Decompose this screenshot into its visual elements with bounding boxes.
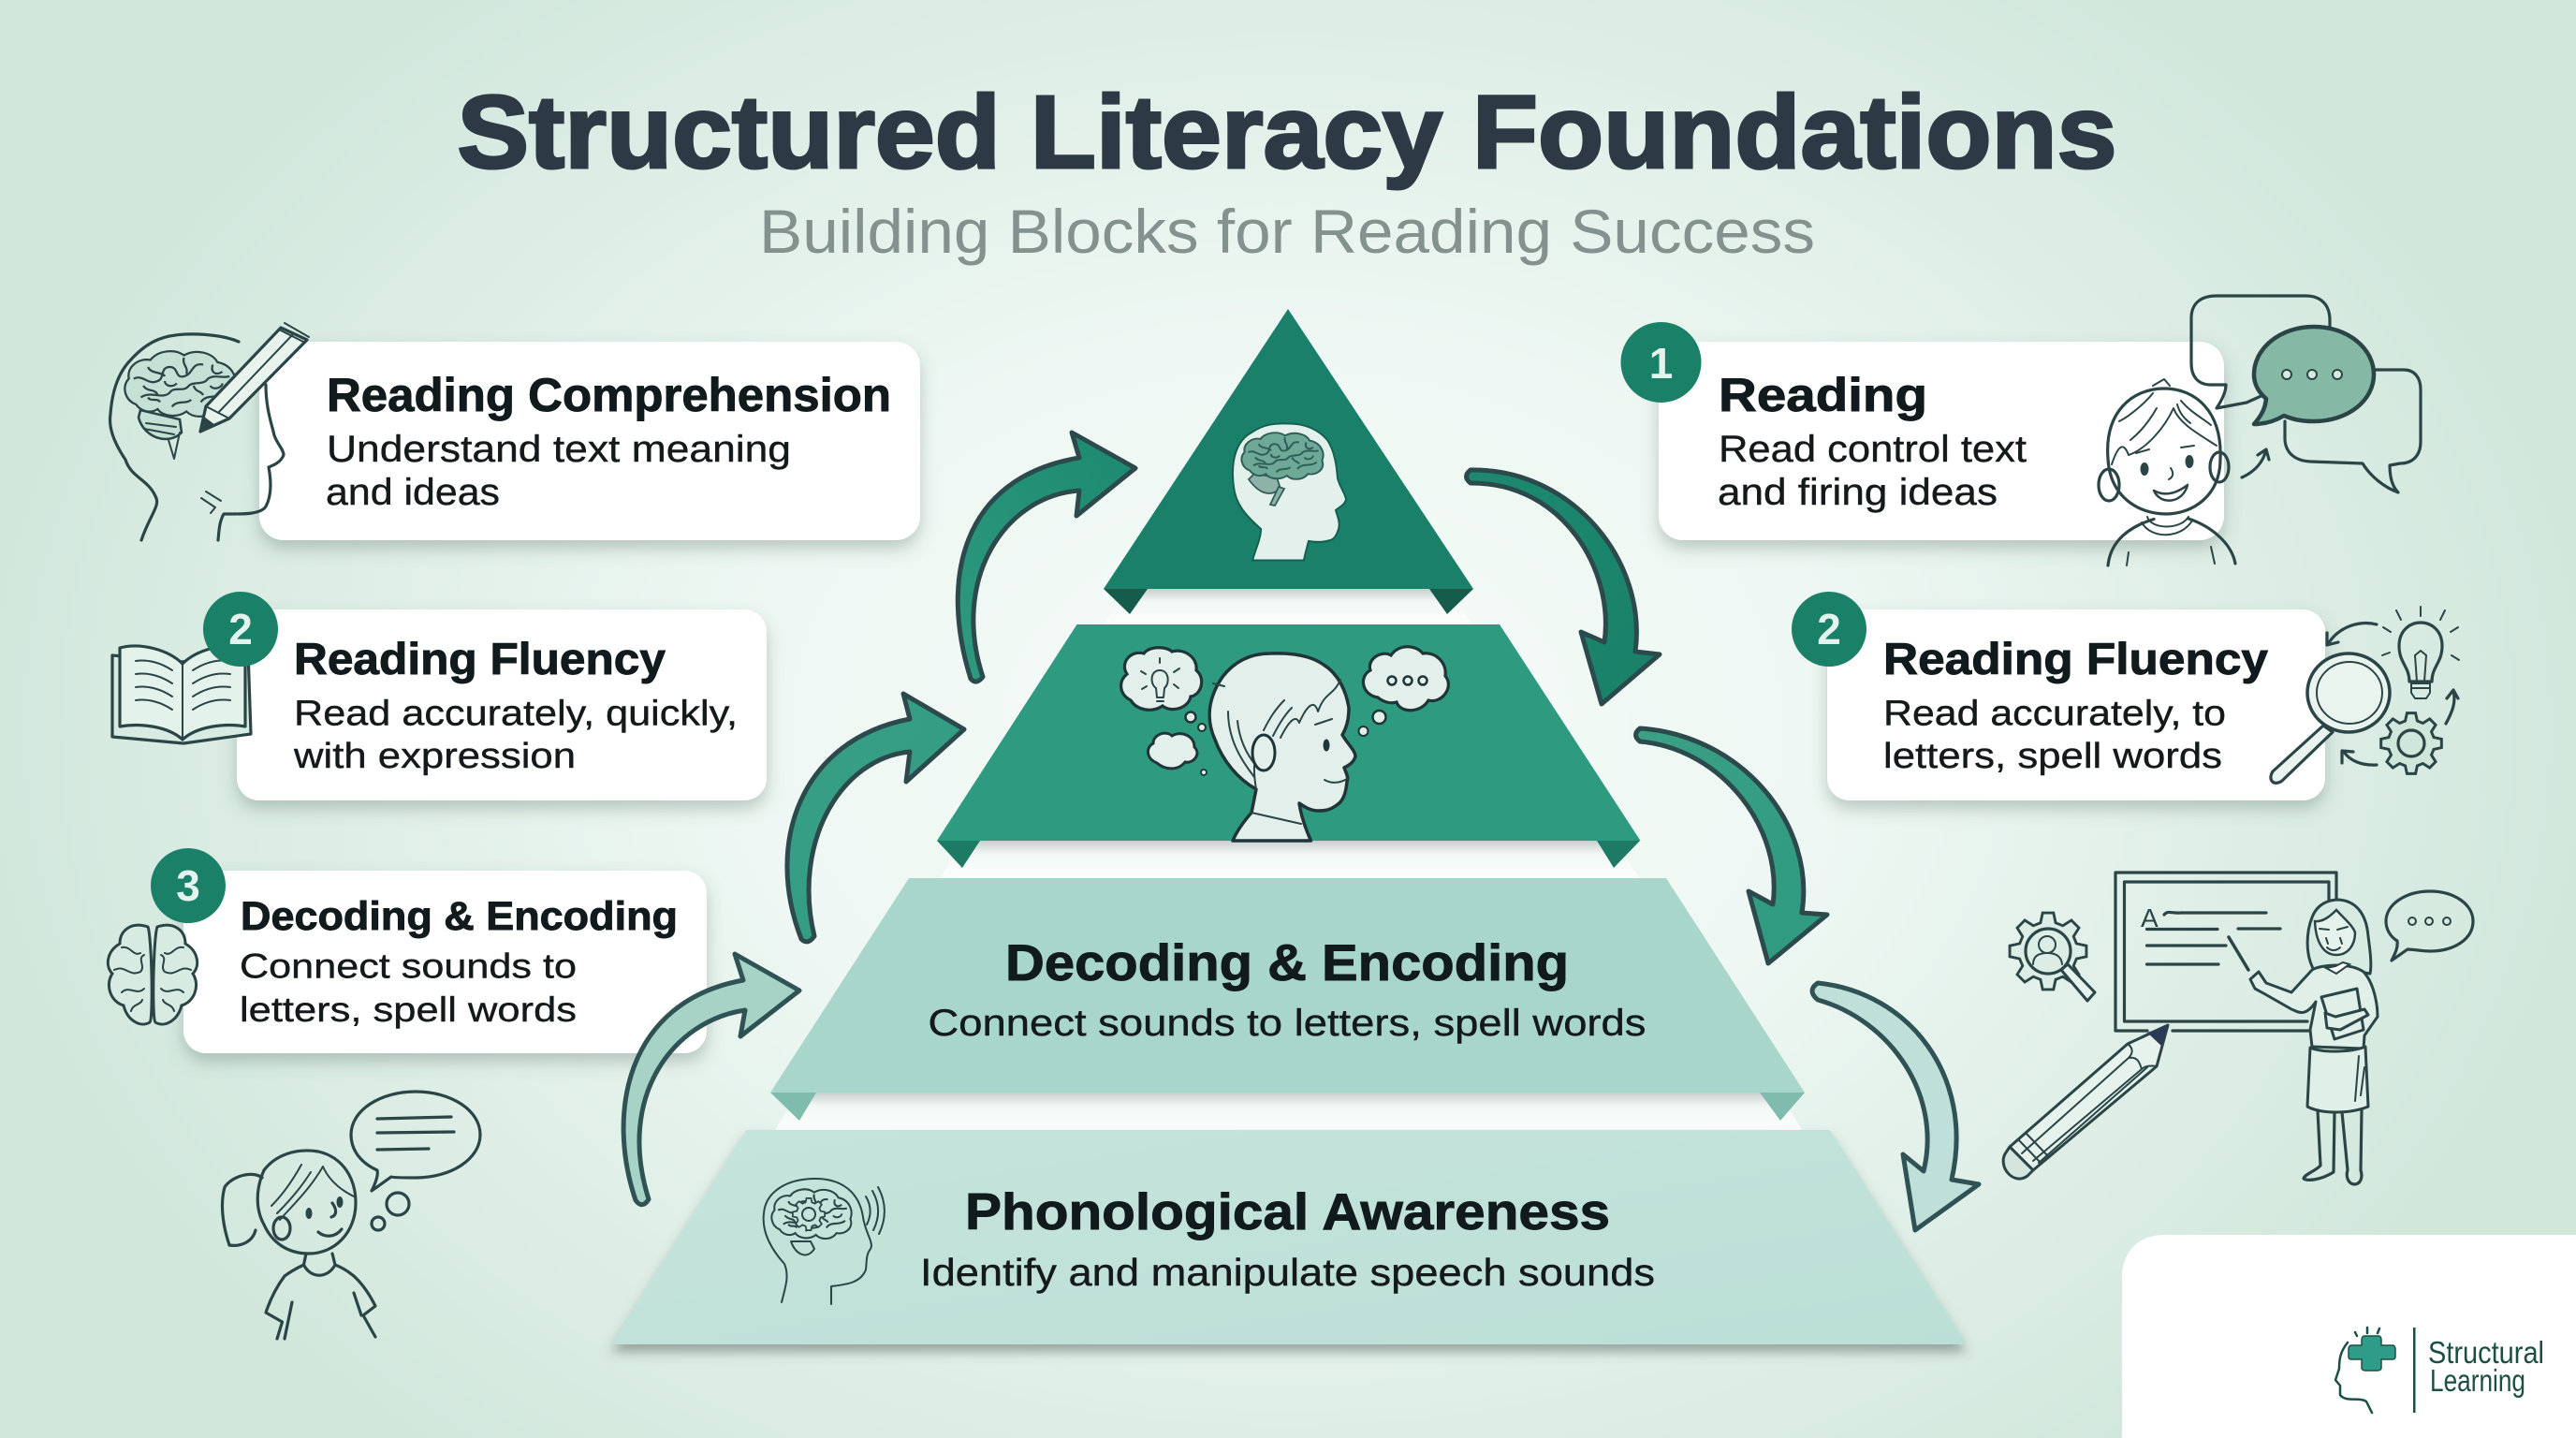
magnifier [2271, 653, 2390, 783]
icon: girl with speech bubble [222, 1092, 480, 1339]
card description: Read control text [1719, 429, 2027, 470]
tier label: Phonological Awareness [965, 1182, 1610, 1240]
arrow: decoding up to middle tier [787, 694, 964, 942]
icon: lightbulb thought cloud [1121, 648, 1202, 710]
logo wordmark: Structural [2428, 1335, 2544, 1370]
ponytail [222, 1174, 262, 1245]
icon: head with brain and pencil [110, 323, 309, 540]
card description: Understand text meaning [327, 429, 791, 470]
card background [237, 609, 767, 800]
arrow: middle tier up to top [958, 433, 1135, 682]
card heading: Reading [1719, 369, 1927, 421]
lightbulb [2382, 607, 2459, 698]
arrow: middle down right [1636, 728, 1827, 963]
logo wordmark: Learning [2430, 1363, 2525, 1398]
subtitle: Building Blocks for Reading Success [759, 197, 1815, 266]
logo panel [2122, 1235, 2576, 1438]
badge 3: 3 [176, 861, 200, 910]
tier: phonological awareness [611, 1130, 1967, 1344]
card description: and firing ideas [1718, 472, 1998, 513]
icon: head silhouette with brain [1233, 423, 1346, 560]
card description: letters, spell words [240, 990, 577, 1029]
card background [259, 342, 920, 540]
tier description: Identify and manipulate speech sounds [920, 1251, 1655, 1294]
card background [1827, 609, 2325, 800]
logo divider [2413, 1328, 2415, 1413]
card description: and ideas [326, 472, 500, 513]
card description: letters, spell words [1883, 737, 2222, 776]
badge 2 (left): 2 [228, 605, 253, 653]
icon: boy profile [1209, 653, 1355, 841]
badge 2: 2 [1817, 605, 1841, 653]
card: reading fluency (left) [237, 609, 767, 800]
filled speech bubble [2254, 327, 2374, 424]
tier description: Connect sounds to letters, spell words [929, 1003, 1646, 1044]
boy [2099, 379, 2235, 565]
card: reading comprehension [259, 342, 920, 540]
gear [2381, 713, 2441, 773]
tier: decoding and encoding [770, 878, 1805, 1121]
outlined speech bubble lower [2285, 370, 2421, 492]
card description: Connect sounds to [240, 947, 577, 985]
icon: magnifier, bulb and gear [2271, 607, 2459, 783]
arrow: top down right [1466, 470, 1660, 704]
badge 3 [151, 848, 226, 923]
tier: middle with boy and thoughts [937, 624, 1640, 868]
card heading: Reading Fluency [1883, 634, 2268, 683]
tier label: Decoding & Encoding [1005, 933, 1569, 991]
icon: small thought cloud [1148, 712, 1207, 775]
arrow: bottom tier up to decoding [623, 954, 799, 1205]
tier: top with head and brain [1104, 309, 1473, 614]
card description: with expression [293, 737, 576, 776]
teacher [2250, 900, 2378, 1184]
card: reading fluency (right) [1792, 592, 2325, 800]
icon: boy with speech bubbles [2099, 296, 2421, 565]
whiteboard [2115, 873, 2336, 1031]
icon: classroom board and teacher [2115, 873, 2473, 1184]
badge 1 [1621, 322, 1702, 403]
body [266, 1254, 375, 1339]
icon: top-view brain [108, 925, 198, 1024]
outlined speech bubble [2191, 296, 2330, 408]
speech bubble [351, 1092, 480, 1191]
card description: Read accurately, quickly, [294, 695, 738, 734]
icon: gear with person and magnifier [2010, 913, 2095, 1001]
cycle arrows [2327, 624, 2458, 765]
title: Structured Literacy Foundations [457, 75, 2117, 190]
card heading: Reading Fluency [294, 634, 666, 683]
teacher speech bubble [2386, 891, 2473, 961]
card: decoding and encoding (left) [151, 848, 707, 1053]
icon: large pencil [2003, 1025, 2168, 1179]
gap shadows between tiers [775, 589, 1802, 1130]
head [257, 1151, 356, 1254]
icon: head with brain gear and sound waves [764, 1179, 885, 1304]
card background [183, 871, 707, 1053]
card background [1659, 342, 2224, 540]
card heading: Reading Comprehension [327, 369, 891, 421]
card: reading (right) [1621, 322, 2224, 540]
card heading: Decoding & Encoding [241, 894, 678, 939]
badge 1: 1 [1649, 339, 1673, 388]
badge 2 [1792, 592, 1866, 667]
arrow: lower down right [1812, 983, 1979, 1230]
card description: Read accurately, to [1883, 695, 2226, 734]
icon: dots thought cloud [1359, 647, 1448, 736]
badge 2 (left) [203, 592, 278, 667]
logo icon: head and cross [2335, 1328, 2395, 1413]
whiteboard: A [2141, 903, 2159, 932]
small arrow [2242, 449, 2269, 477]
pyramid [611, 309, 1967, 1344]
pencil [200, 323, 309, 432]
icon: open book [112, 646, 251, 743]
panel background [2122, 1235, 2576, 1438]
